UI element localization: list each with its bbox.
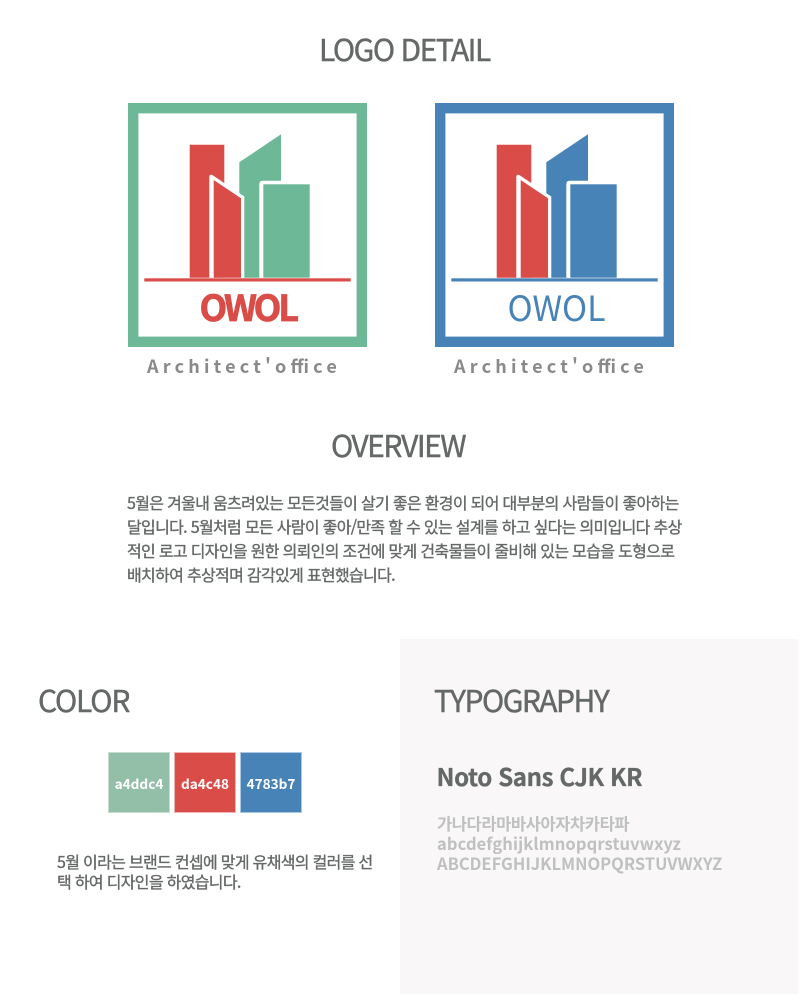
logo caption: blue: Architect'office (454, 353, 648, 379)
logo: green version (128, 103, 367, 347)
overview text: 달입니다. 5월처럼 모든 사람이 좋아/만족 할 수 있는 설계를 하고 싶다는 의미입니다 추상 (127, 514, 682, 538)
overview text: 배치하여 추상적며 감각있게 표현했습니다. (127, 562, 395, 586)
swatch: a4ddc4: a4ddc4 (115, 773, 163, 793)
swatch: 4783b7 (240, 752, 302, 813)
font specimen: abcdefghijklmnopqrstuvwxyz (437, 831, 681, 855)
swatch: da4c48: da4c48 (181, 773, 229, 793)
overview text (127, 490, 682, 586)
font specimen: ABCDEFGHIJKLMNOPQRSTUVWXYZ (437, 851, 722, 875)
heading: color: COLOR (38, 677, 129, 721)
color description: 5월 이라는 브랜드 컨셉에 맞게 유채색의 컬러를 선 (57, 849, 373, 873)
color description: 택 하여 디자인을 하였습니다. (57, 869, 241, 893)
heading: logo detail: LOGO DETAIL (319, 26, 490, 70)
logo caption: green: Architect'office (147, 353, 341, 379)
swatch: da4c48 (174, 752, 236, 813)
swatch: a4ddc4 (108, 752, 170, 813)
logo: blue version (435, 103, 674, 347)
font specimen: 가나다라마바사아자차카타파 (437, 811, 629, 835)
heading: overview: OVERVIEW (331, 422, 465, 466)
logo: green version: OWOL (200, 280, 299, 332)
font name: Noto Sans CJK KR (436, 758, 642, 793)
color description (57, 849, 373, 893)
overview text: 5월은 겨울내 움츠려있는 모든것들이 살기 좋은 환경이 되어 대부분의 사람들이 좋아하는 (127, 490, 679, 514)
heading: typography: TYPOGRAPHY (434, 677, 608, 721)
overview text: 적인 로고 디자인을 원한 의뢰인의 조건에 맞게 건축물들이 줄비해 있는 모습을 도형으로 (127, 538, 674, 562)
typography panel background (400, 639, 798, 994)
logo: blue version: OWOL (508, 281, 606, 332)
font specimen (437, 811, 722, 875)
swatch: 4783b7: 4783b7 (247, 773, 295, 793)
